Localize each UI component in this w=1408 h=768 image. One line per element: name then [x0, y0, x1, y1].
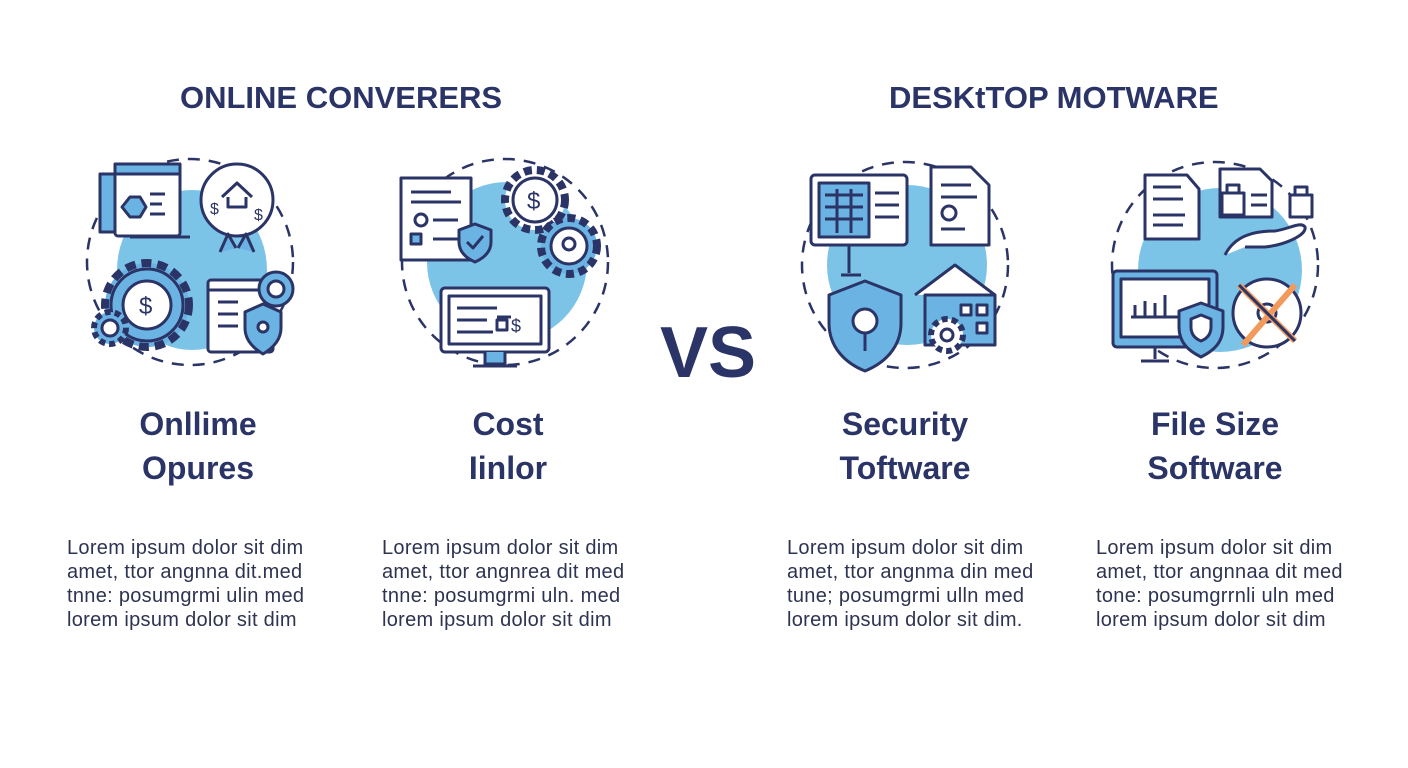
icon: online options: $ — [139, 293, 152, 320]
text block 3: amet, ttor angnma din med — [787, 561, 1034, 583]
heading: security: Toftware — [840, 450, 970, 486]
text block 3: Lorem ipsum dolor sit dim — [787, 537, 1023, 559]
heading: file size: Software — [1147, 450, 1283, 486]
heading: security: Security — [842, 406, 968, 442]
text block 2: amet, ttor angnrea dit med — [382, 561, 624, 583]
title: desktop software: DESKtTOP MOTWARE — [889, 80, 1219, 115]
icon: online options — [86, 158, 294, 366]
text block 1: lorem ipsum dolor sit dim — [67, 609, 297, 631]
icon: cost — [400, 158, 610, 368]
text block 3: lorem ipsum dolor sit dim. — [787, 609, 1023, 631]
heading: online options — [139, 406, 257, 486]
text block 4: lorem ipsum dolor sit dim — [1096, 609, 1326, 631]
icon: file size — [1110, 160, 1320, 370]
heading: file size: File Size — [1151, 406, 1279, 442]
heading: online options: Onllime — [139, 406, 257, 442]
heading: cost — [469, 406, 547, 486]
text block 1 — [67, 537, 304, 631]
vs label: VS — [660, 313, 756, 393]
heading: cost: Cost — [472, 406, 544, 442]
text block 1: tnne: posumgrmi ulin med — [67, 585, 304, 607]
text block 4: Lorem ipsum dolor sit dim — [1096, 537, 1332, 559]
text block 3 — [787, 537, 1034, 631]
text block 2: lorem ipsum dolor sit dim — [382, 609, 612, 631]
text block 2: Lorem ipsum dolor sit dim — [382, 537, 618, 559]
text block 4 — [1096, 537, 1343, 631]
text block 3: tune; posumgrmi ulln med — [787, 585, 1024, 607]
heading: online options: Opures — [142, 450, 254, 486]
icon: cost: $ — [527, 188, 540, 215]
text block 1: Lorem ipsum dolor sit dim — [67, 537, 303, 559]
text block 2: tnne: posumgrmi uln. med — [382, 585, 620, 607]
icon: online options: $ — [254, 207, 263, 224]
icon: cost: $ — [511, 316, 521, 336]
heading: file size — [1147, 406, 1283, 486]
icon: security — [800, 160, 1010, 372]
text block 4: tone: posumgrrnli uln med — [1096, 585, 1335, 607]
heading: cost: Iinlor — [469, 450, 547, 486]
icon: online options: $ — [210, 201, 219, 218]
heading: security — [840, 406, 970, 486]
text block 1: amet, ttor angnna dit.med — [67, 561, 302, 583]
title: online converters: ONLINE CONVERERS — [180, 80, 502, 115]
text block 4: amet, ttor angnnaa dit med — [1096, 561, 1343, 583]
text block 2 — [382, 537, 624, 631]
